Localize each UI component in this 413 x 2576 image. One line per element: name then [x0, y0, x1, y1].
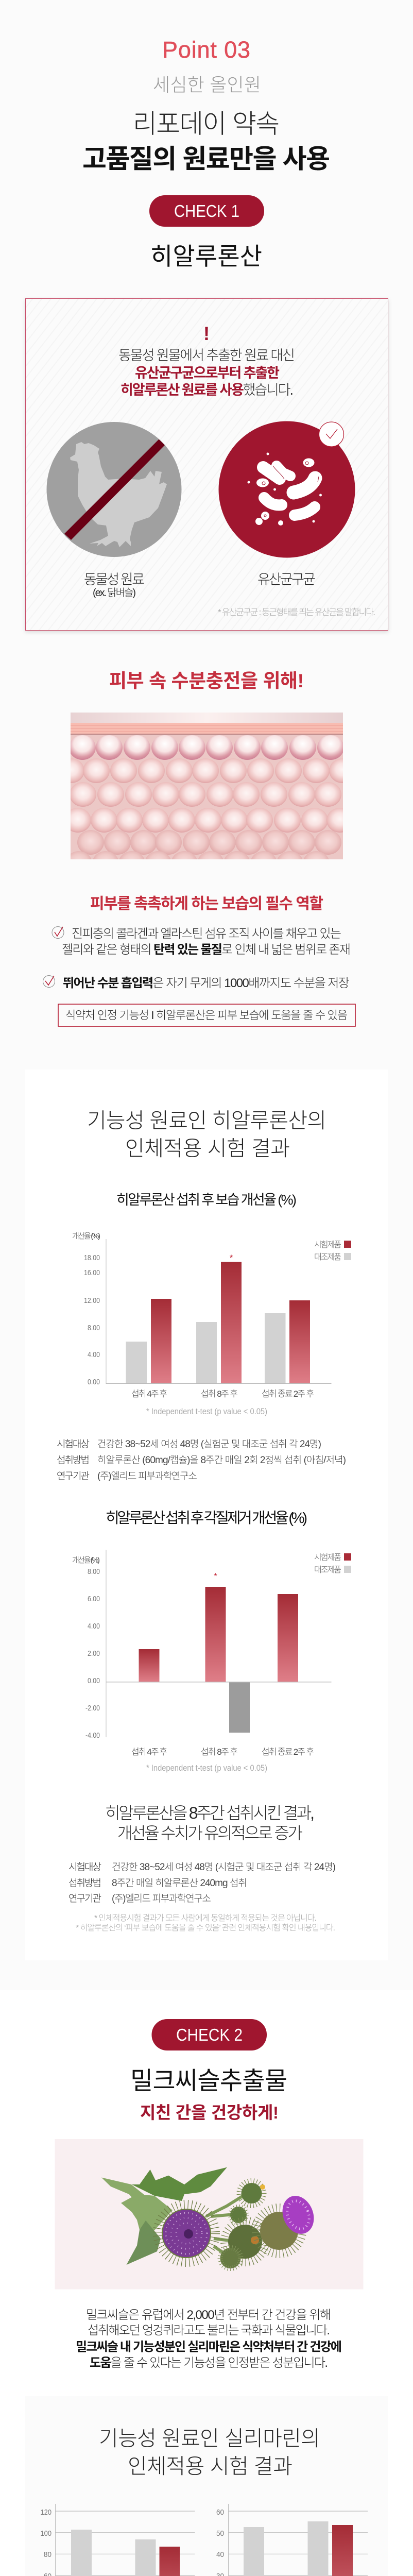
- label: animal source: [84, 572, 145, 599]
- legend: 대조제품: [314, 1252, 341, 1262]
- panel text: 히알루론산 원료를 사용했습니다.: [121, 382, 294, 398]
- chart title 2: 히알루론산 섭취 후 각질제거 개선율 (%): [106, 1510, 307, 1527]
- disclaimers: [76, 1913, 335, 1933]
- paragraph: milk thistle description: 밀크씨슬은 유럽에서 2,000년 전부터 간 건강을 위해: [86, 2308, 331, 2322]
- stems: [206, 2196, 243, 2257]
- y axis labels: 18.00: [84, 1253, 100, 1262]
- subheading: healthy liver: 지친 간을 건강하게!: [140, 2103, 279, 2122]
- headline line 1: 리포데이 약속: [133, 109, 280, 139]
- callout: MFDS functional claim: [58, 1004, 355, 1026]
- y axis labels: 80: [44, 2550, 51, 2559]
- legend: 시험제품: [314, 1553, 341, 1562]
- bar chart: moisture improvement: [72, 1232, 351, 1399]
- significance star: *: [230, 1253, 233, 1263]
- study details 2: [68, 1861, 336, 1904]
- illustration: milk thistle on pink background: [55, 2139, 364, 2290]
- badge: check 2: [151, 2019, 267, 2050]
- heading: essential role of moisturizing: 피부를 촉촉하게 하는 보습의 필수 역할: [90, 895, 323, 912]
- x axis labels: 섭취 종료 2주 후: [262, 1747, 314, 1757]
- callout: MFDS functional claim: 식약처 인정 기능성 I 히알루론산은 피부 보습에 도움을 줄 수 있음: [65, 1009, 348, 1022]
- panel text: 동물성 원물에서 추출한 원료 대신: [118, 348, 295, 363]
- y axis labels: 4.00: [88, 1350, 100, 1359]
- legend: [314, 1240, 351, 1262]
- panel title: 기능성 원료인 히알루론산의: [87, 1109, 326, 1132]
- y axis labels: 120: [40, 2508, 51, 2517]
- label: lactococcus: 유산균구균: [257, 572, 316, 587]
- y axis labels: [72, 1556, 100, 1740]
- study details 1: [57, 1438, 346, 1482]
- x axis labels: 섭취 4주 후: [131, 1389, 167, 1399]
- icon: check: [52, 926, 64, 939]
- study details 2: 연구기관: [68, 1893, 101, 1904]
- y axis labels: 0.00: [88, 1378, 100, 1386]
- paragraph: milk thistle description: 밀크씨슬 내 기능성분인 실리마린은 식약처부터 간 건강에: [76, 2340, 342, 2354]
- subtitle: 세심한 올인원: [153, 74, 261, 95]
- icon: approved check badge: [319, 422, 344, 447]
- bars: [71, 2530, 180, 2576]
- study details 1: 히알루론산 (60mg/캡슐)을 8주간 매일 2회 2정씩 섭취 (아침/저녁): [97, 1454, 346, 1466]
- y axis labels: 8.00: [88, 1567, 100, 1576]
- y axis labels: [40, 2508, 51, 2576]
- study details 2: 섭취방법: [68, 1877, 101, 1889]
- panel: hyaluronic acid clinical results: [25, 1070, 388, 1960]
- panel: raw material comparison: [26, 299, 388, 631]
- panel: silymarin clinical results: [25, 2396, 388, 2576]
- y axis labels: [216, 2508, 225, 2576]
- y axis labels: 8.00: [88, 1324, 100, 1332]
- y axis labels: 12.00: [84, 1296, 100, 1305]
- y axis labels: 6.00: [88, 1595, 100, 1603]
- pink flower: [259, 2191, 319, 2251]
- study details 2: (주)엘리드 피부과학연구소: [112, 1893, 211, 1904]
- point label: Point 03: [162, 37, 250, 63]
- bars: [139, 1587, 298, 1733]
- badge: check 1: CHECK 1: [174, 201, 239, 221]
- list item 1: [52, 926, 351, 957]
- bar chart: ALT: [40, 2504, 195, 2576]
- study details 1: (주)엘리드 피부과학연구소: [97, 1470, 197, 1482]
- disclaimers: * 인체적용시험 결과가 모든 사람에게 동일하게 적용되는 것은 아닙니다.: [94, 1913, 317, 1923]
- thistle buds: [220, 2182, 265, 2268]
- result summary: [105, 1804, 315, 1842]
- grid lines: [228, 2504, 368, 2576]
- headline line 2: 고품질의 원료만을 사용: [82, 144, 330, 174]
- x axis labels: [131, 1389, 314, 1399]
- x axis labels: 섭취 4주 후: [131, 1747, 167, 1757]
- icon: lactococcus bacteria: [218, 421, 355, 557]
- study details 1: 시험대상: [57, 1438, 90, 1450]
- x axis labels: 섭취 종료 2주 후: [262, 1389, 314, 1399]
- heading: skin hydration: 피부 속 수분충전을 위해!: [109, 670, 304, 691]
- list text 1: 진피층의 콜라겐과 엘라스틴 섬유 조직 사이를 채우고 있는: [72, 927, 341, 941]
- significance star: *: [214, 1571, 217, 1581]
- x axis labels: 섭취 8주 후: [201, 1747, 238, 1757]
- y axis labels: 4.00: [88, 1622, 100, 1631]
- study details 1: 연구기관: [57, 1470, 90, 1482]
- label: animal source: (ex. 닭벼슬): [93, 587, 136, 599]
- y axis labels: 60: [216, 2508, 224, 2517]
- list text 2: 뛰어난 수분 흡입력은 자기 무게의 1000배까지도 수분을 저장: [63, 976, 350, 990]
- panel title: 인체적용 시험 결과: [125, 1137, 290, 1160]
- badge: check 1: [149, 195, 264, 227]
- panel text: 유산균구균으로부터 추출한: [135, 365, 280, 381]
- panel title: 인체적용 시험 결과: [128, 2454, 292, 2478]
- y axis labels: -2.00: [85, 1704, 100, 1713]
- list item 2: [43, 976, 350, 990]
- bar chart: exfoliation improvement: [72, 1550, 351, 1757]
- x axis labels: 섭취 8주 후: [201, 1389, 238, 1399]
- paragraph: milk thistle description: 도움을 줄 수 있다는 기능성을 인정받은 성분입니다.: [90, 2356, 328, 2370]
- panel text: [118, 348, 295, 398]
- footnote: * 유산균구균 : 둥근형태를 띄는 유산균을 말합니다.: [218, 607, 375, 617]
- leaves: [101, 2167, 227, 2265]
- panel title: 기능성 원료인 실리마린의: [99, 2427, 320, 2450]
- paragraph: milk thistle description: 섭취해오던 엉겅퀴라고도 불리는 국화과 식물입니다.: [88, 2324, 330, 2337]
- y axis labels: 40: [216, 2550, 224, 2559]
- icon: chicken crossed out: [46, 422, 181, 557]
- bars: [244, 2521, 353, 2576]
- y axis labels: -4.00: [85, 1731, 100, 1740]
- panel title: [87, 1109, 326, 1160]
- y axis labels: 100: [40, 2529, 51, 2538]
- label: animal source: 동물성 원료: [84, 572, 145, 587]
- x axis labels: [131, 1747, 314, 1757]
- list text 1: [62, 927, 351, 957]
- y axis labels: 50: [216, 2529, 224, 2538]
- list text 1: 젤리와 같은 형태의 탄력 있는 물질로 인체 내 넓은 범위로 존재: [62, 943, 351, 957]
- y axis labels: [72, 1232, 100, 1386]
- statistics note: * Independent t-test (p value < 0.05): [146, 1406, 267, 1416]
- legend: 대조제품: [314, 1565, 341, 1574]
- study details 2: 시험대상: [68, 1861, 101, 1873]
- exclamation mark: !: [203, 323, 210, 344]
- y axis labels: 16.00: [84, 1268, 100, 1277]
- study details 2: 8주간 매일 히알루론산 240mg 섭취: [112, 1877, 247, 1889]
- heading: milk thistle extract: 밀크씨슬추출물: [130, 2067, 287, 2095]
- y axis labels: 0.00: [88, 1676, 100, 1685]
- grid lines: [55, 2504, 195, 2576]
- study details 2: 건강한 38~52세 여성 48명 (시험군 및 대조군 섭취 각 24명): [112, 1861, 336, 1873]
- statistics note: * Independent t-test (p value < 0.05): [146, 1763, 267, 1773]
- legend: [314, 1553, 351, 1574]
- legend: 시험제품: [314, 1240, 341, 1249]
- panel title: [99, 2427, 320, 2478]
- icon: check: [43, 976, 55, 987]
- chart title 1: 히알루론산 섭취 후 보습 개선율 (%): [116, 1192, 297, 1208]
- header: point 03: [82, 37, 330, 174]
- heading: hyaluronic acid: 히알루론산: [150, 243, 262, 270]
- bar chart: AST: [216, 2504, 368, 2576]
- purple flower: [161, 2208, 212, 2259]
- badge: check 2: CHECK 2: [176, 2025, 243, 2044]
- bars: [126, 1262, 310, 1383]
- illustration: skin cells and water bubbles: [71, 713, 343, 859]
- study details 1: 건강한 38~52세 여성 48명 (실험군 및 대조군 섭취 각 24명): [97, 1438, 321, 1450]
- result summary: 개선율 수치가 유의적으로 증가: [117, 1824, 303, 1842]
- study details 1: 섭취방법: [57, 1454, 90, 1466]
- y axis labels: 개선율 (%): [72, 1232, 100, 1241]
- disclaimers: * 히알루론산의 ‘피부 보습에 도움을 줄 수 있음’ 관련 인체적용시험 확인 내용입니다.: [76, 1923, 335, 1933]
- result summary: 히알루론산을 8주간 섭취시킨 결과,: [105, 1804, 315, 1822]
- y axis labels: 2.00: [88, 1649, 100, 1658]
- paragraph: milk thistle description: [76, 2308, 342, 2370]
- y axis labels: 개선율 (%): [72, 1556, 100, 1565]
